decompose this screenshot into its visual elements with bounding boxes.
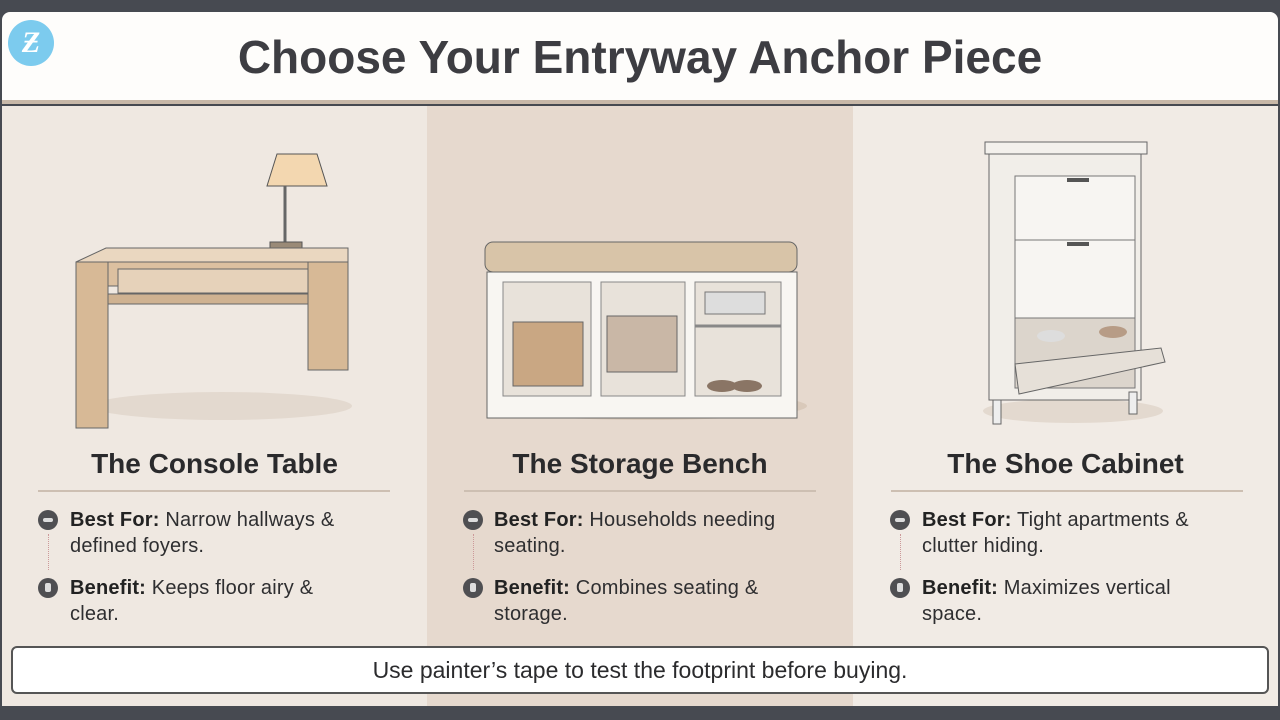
callout: tip box: [11, 646, 1269, 694]
best for: Best For: Narrow hallways & defined foyers.: [70, 509, 334, 557]
heading: The Shoe Cabinet: [947, 448, 1184, 479]
illustration: storage bench: [484, 242, 807, 420]
best for: Best For: Tight apartments & clutter hiding.: [922, 509, 1189, 557]
callout: tip box: Use painter’s tape to test the footprint before buying.: [373, 657, 907, 683]
panel: console table: [2, 106, 427, 706]
logo badge: Ƶ: [22, 26, 40, 59]
panel: shoe cabinet: [853, 106, 1278, 706]
illustration: shoe cabinet: [983, 142, 1166, 424]
heading: The Storage Bench: [512, 448, 768, 479]
benefit: Benefit: Keeps floor airy & clear.: [70, 577, 313, 625]
illustration: console table with lamp: [76, 154, 352, 428]
heading: The Console Table: [91, 448, 338, 479]
panel: storage bench: [427, 106, 853, 706]
best for: Best For: Households needing seating.: [494, 509, 775, 557]
benefit: Benefit: Combines seating & storage.: [494, 577, 758, 625]
title: Choose Your Entryway Anchor Piece: [238, 31, 1042, 83]
logo badge: [8, 20, 54, 66]
header bar: [2, 12, 1278, 104]
benefit: Benefit: Maximizes vertical space.: [922, 577, 1171, 625]
